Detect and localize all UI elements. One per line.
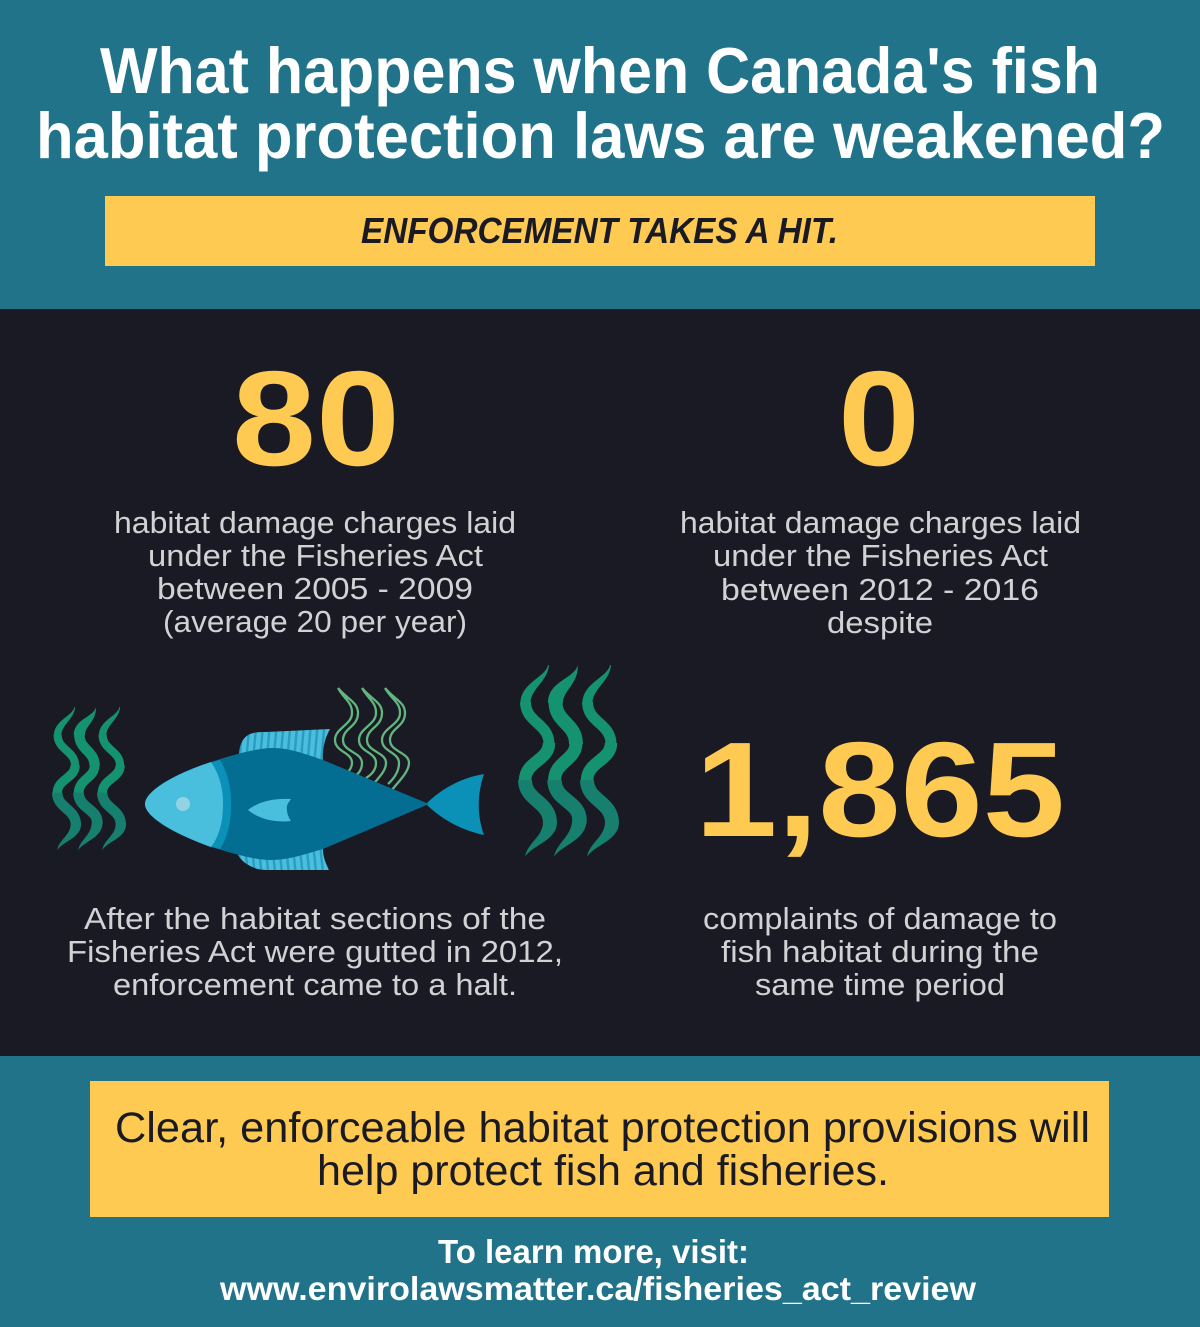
stat: 1,865 complaints xyxy=(695,714,1065,1002)
title: What happens when Canada's fish xyxy=(100,34,1100,107)
text: after the habitat sections: After the habitat sections of the xyxy=(84,901,546,936)
stat: 1,865 complaints: same time period xyxy=(755,967,1005,1002)
belly fin xyxy=(238,844,329,870)
stat: 80 charges: (average 20 per year) xyxy=(163,604,467,639)
link text xyxy=(219,1233,976,1307)
subtitle banner xyxy=(105,196,1095,266)
stat: 80 charges: under the Fisheries Act xyxy=(148,538,483,573)
link text: www.envirolawsmatter.ca/fisheries_act_review xyxy=(219,1270,976,1307)
stat: 1,865 complaints: fish habitat during the xyxy=(721,934,1039,969)
icon: fish with thin seaweed xyxy=(145,688,484,870)
stat: 0 charges xyxy=(680,343,1081,640)
head xyxy=(145,762,223,847)
stat: 80 charges: habitat damage charges laid xyxy=(114,505,516,540)
callout: help protect fish and fisheries. xyxy=(317,1147,889,1195)
subtitle banner: ENFORCEMENT TAKES A HIT. xyxy=(361,210,838,251)
text: after the habitat sections xyxy=(67,901,563,1002)
stat: 80 charges: between 2005 - 2009 xyxy=(157,571,473,606)
stat: 1,865 complaints: 1,865 xyxy=(695,714,1065,865)
header band xyxy=(0,0,1200,309)
tail xyxy=(426,774,484,835)
stat: 0 charges: between 2012 - 2016 xyxy=(721,572,1039,607)
body xyxy=(145,748,429,860)
stat: 0 charges: habitat damage charges laid xyxy=(680,505,1081,540)
eye xyxy=(176,797,190,811)
text: after the habitat sections: Fisheries Act were gutted in 2012, xyxy=(67,934,563,969)
gill band xyxy=(145,760,231,849)
dorsal fin xyxy=(239,729,330,764)
text: after the habitat sections: enforcement came to a halt. xyxy=(113,967,517,1002)
icon: left seaweed xyxy=(54,707,126,850)
stat: 0 charges: 0 xyxy=(838,343,920,494)
pectoral fin xyxy=(248,799,291,821)
stat: 0 charges: despite xyxy=(827,605,933,640)
icon: right seaweed xyxy=(520,665,619,857)
stat: 0 charges: under the Fisheries Act xyxy=(713,538,1048,573)
stat: 80 charges xyxy=(114,343,516,639)
main dark panel xyxy=(0,309,1200,1056)
link text: To learn more, visit: xyxy=(438,1233,749,1270)
stat: 1,865 complaints: complaints of damage to xyxy=(703,901,1057,936)
title xyxy=(36,34,1165,172)
thin seaweed xyxy=(335,688,409,790)
stat: 80 charges: 80 xyxy=(232,343,400,494)
footer band xyxy=(0,1056,1200,1327)
callout: Clear, enforceable habitat protection provisions will xyxy=(115,1104,1090,1152)
title: habitat protection laws are weakened? xyxy=(36,99,1165,172)
callout xyxy=(90,1081,1109,1217)
